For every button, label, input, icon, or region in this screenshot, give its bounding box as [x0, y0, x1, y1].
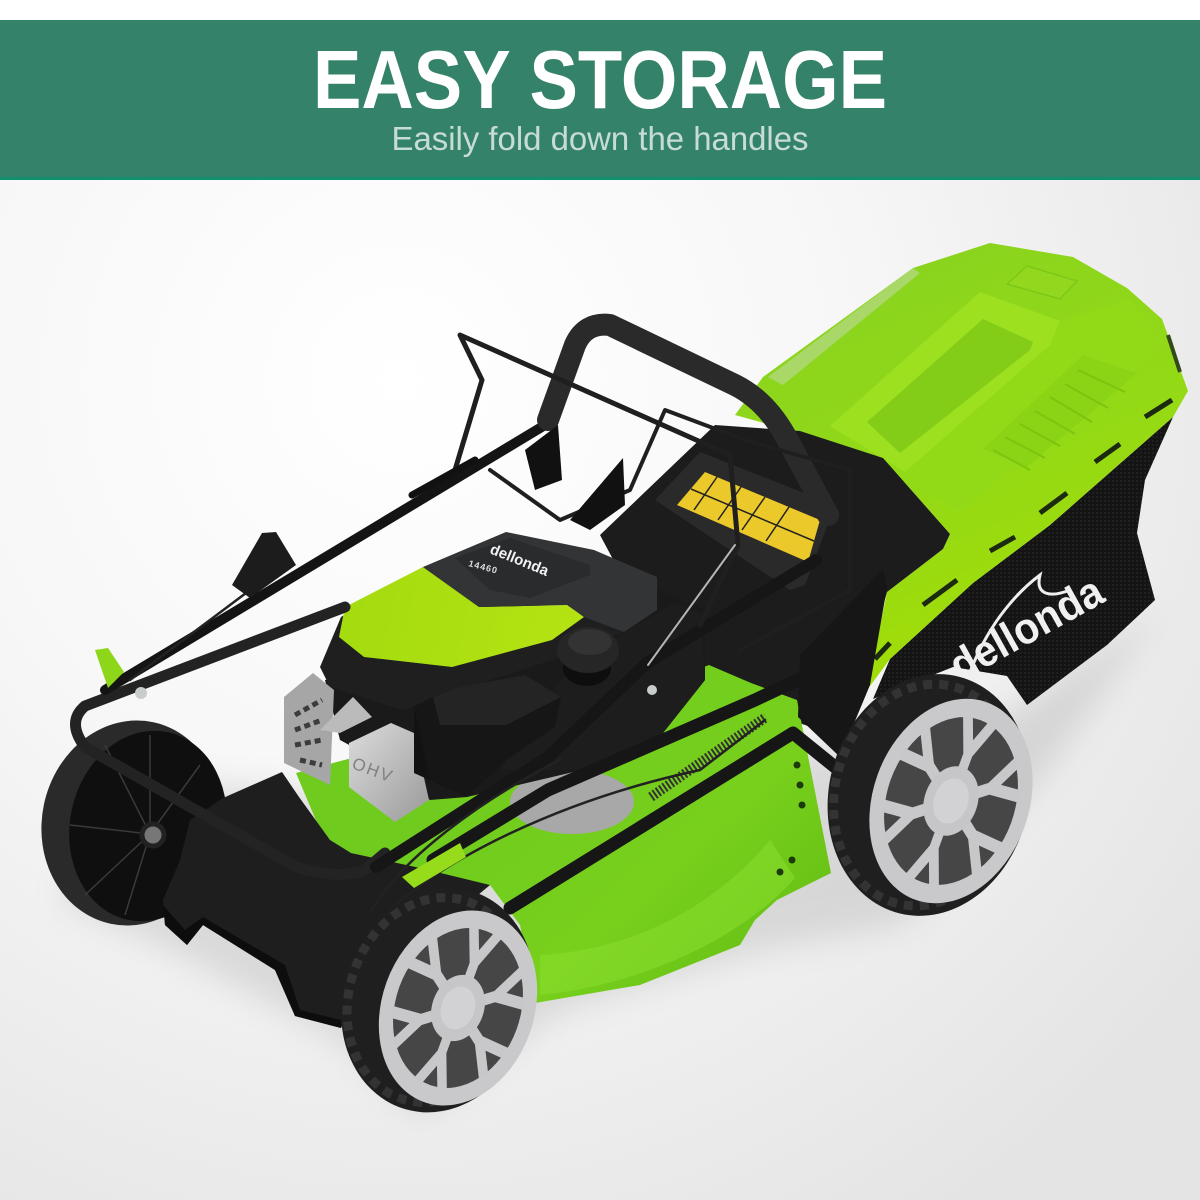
banner: [0, 20, 1200, 180]
cross tube: [433, 657, 846, 860]
title: EASY STORAGE: [313, 33, 887, 126]
engine top panel: dellonda: [488, 541, 552, 580]
engine lime cover: [339, 567, 584, 667]
front wheel: [312, 862, 564, 1138]
spring: [651, 717, 766, 797]
main upper handle: [105, 425, 545, 690]
fuel cap: [557, 627, 619, 686]
bag carry handle recess: [867, 319, 1033, 453]
engine top panel: 14460: [467, 558, 499, 576]
label recess: [655, 452, 835, 590]
bag black mesh: [873, 417, 1173, 705]
front black bumper: [163, 772, 490, 1028]
engine block: [284, 532, 705, 822]
bag logo wave: [970, 575, 1070, 672]
bag vent grille: [983, 355, 1137, 470]
rear side bracket: [798, 569, 887, 757]
left rear small wheel: [23, 704, 244, 942]
lower frame tube: [76, 607, 385, 874]
engine top panel: [423, 532, 657, 632]
fuel tank: [500, 603, 705, 770]
handle mirror clip: [525, 425, 625, 530]
bag lid ridge: [830, 292, 1165, 510]
lawn mower: [23, 243, 1188, 1138]
muffler guard: [284, 673, 334, 785]
frame bolts: [135, 685, 657, 699]
engine underlay: [325, 590, 705, 800]
air filter box: [414, 675, 561, 797]
deck: [296, 665, 831, 1003]
engine black shroud: [320, 567, 657, 710]
return tube: [376, 560, 816, 867]
green height lever: [95, 648, 124, 688]
bag top latch: [1007, 266, 1077, 299]
deck highlights: [540, 840, 795, 995]
silver choke wire: [648, 545, 735, 665]
bag dashes: [875, 400, 1172, 659]
OHV metal shroud: OHV: [350, 754, 396, 786]
rear black housing: [600, 425, 950, 740]
handle folded tubes: [76, 325, 850, 915]
subtitle: Easily fold down the handles: [392, 120, 808, 157]
warning label: [677, 472, 820, 562]
rear wheel: [802, 652, 1060, 938]
bag lime body: [735, 243, 1188, 690]
lever pivot: [412, 460, 475, 495]
bag logo: dellonda: [941, 566, 1112, 691]
bag side vents: [768, 268, 920, 385]
bag corner slot: [1168, 335, 1180, 372]
exhaust pipe: [320, 697, 372, 733]
ground shadow: [60, 610, 1160, 1115]
second bail: [490, 410, 850, 650]
green clip on bumper: [402, 843, 466, 888]
deck centre metal: [510, 770, 634, 834]
bag carry handle: [830, 292, 1060, 472]
grass bag: [735, 243, 1188, 705]
bail lever wire: [412, 335, 738, 625]
cables: [130, 590, 765, 915]
deck tube: [510, 733, 835, 908]
OHV metal shroud: [349, 723, 429, 822]
arch grip: [548, 325, 828, 515]
deck holes: [776, 762, 806, 876]
handle grip lever: [232, 532, 296, 598]
bumper lower lip: [163, 905, 341, 1028]
